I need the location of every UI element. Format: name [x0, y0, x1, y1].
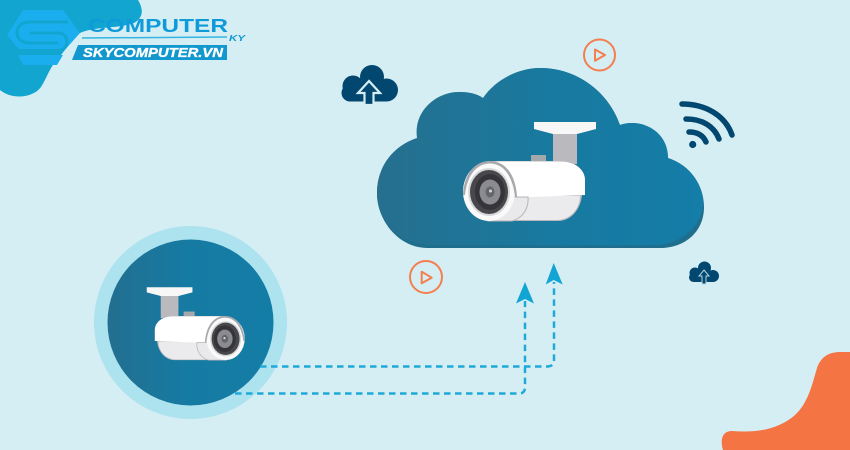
logo wordmark: KY: KY	[229, 33, 247, 43]
logo icon: hexagon S	[7, 10, 80, 65]
logo banner: SKYCOMPUTER.VN	[83, 46, 224, 60]
logo underline	[82, 37, 227, 38]
logo	[7, 10, 247, 65]
arrowhead: right	[546, 263, 563, 284]
main cloud	[377, 68, 704, 248]
icon: play button top	[584, 40, 615, 70]
icon: play button bottom	[410, 261, 442, 293]
camera: small mirrored	[147, 287, 245, 360]
dashed path: lower	[235, 301, 525, 394]
logo wordmark: COMPUTER: COMPUTER	[88, 16, 228, 36]
outer ring	[94, 226, 287, 419]
camera circle	[94, 226, 287, 419]
dashed path: upper	[260, 282, 554, 366]
decorative blob: top-left blue	[0, 0, 142, 96]
icon: upload cloud large	[342, 65, 398, 105]
icon: wifi	[682, 104, 732, 148]
inner disc	[108, 240, 274, 406]
decorative blob: bottom-right orange	[722, 352, 850, 450]
arrowhead: left	[516, 282, 534, 304]
camera: large in cloud	[463, 122, 596, 221]
dashed connection arrows	[235, 263, 563, 394]
icon: upload cloud small	[689, 262, 719, 284]
